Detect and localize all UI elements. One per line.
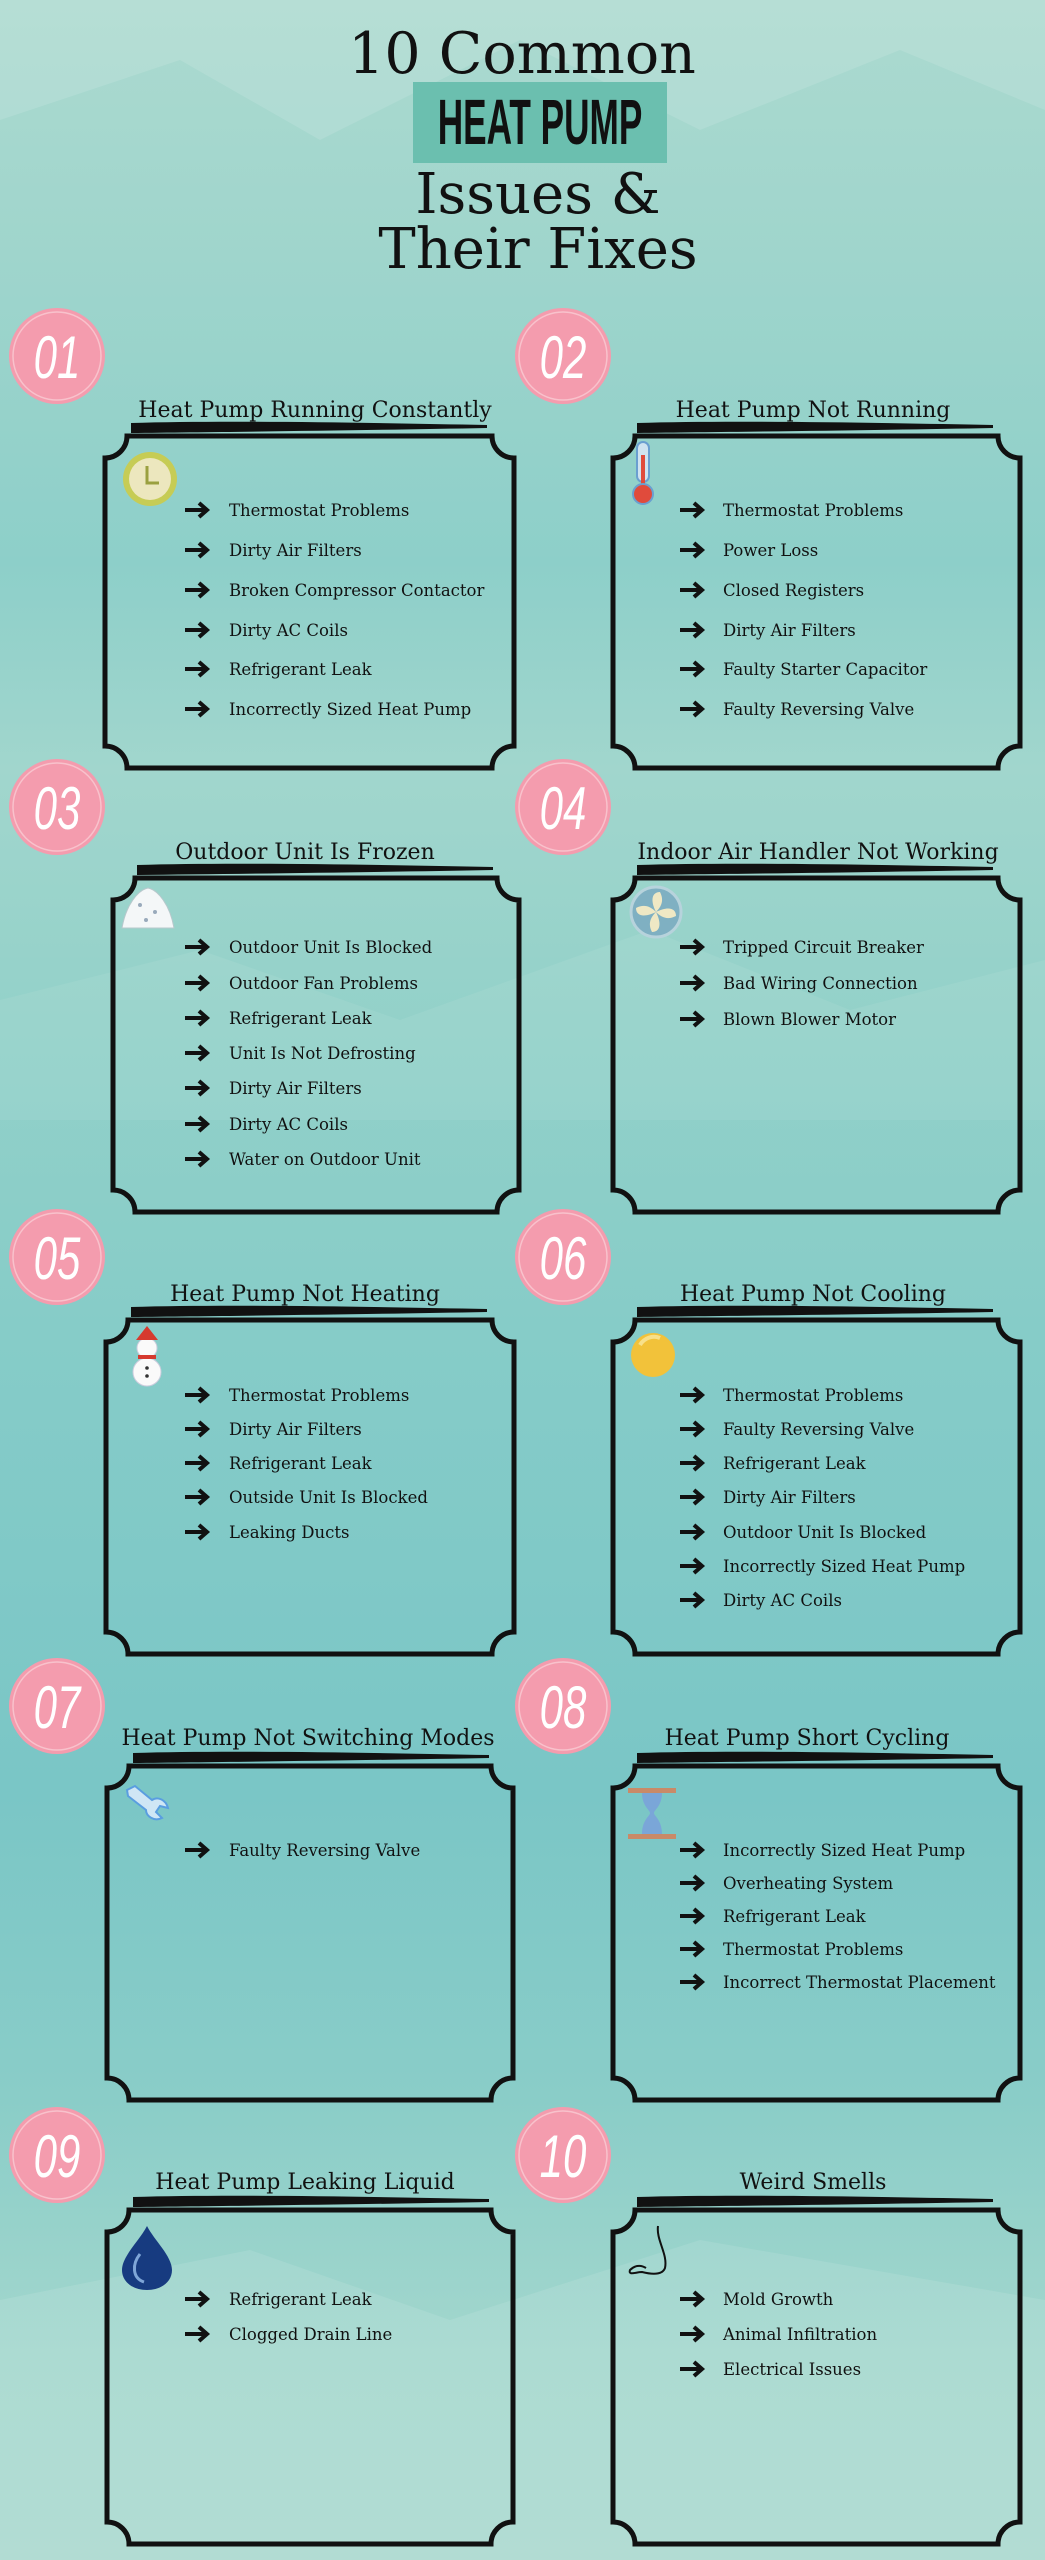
badge 03: 03	[34, 775, 81, 842]
badge 09: 09	[34, 2123, 80, 2190]
panel 04	[613, 878, 1020, 1212]
panel 02: Power Loss	[723, 541, 818, 560]
panel 06: Faulty Reversing Valve	[723, 1420, 914, 1439]
panel 05: Leaking Ducts	[229, 1523, 349, 1542]
badge 07	[9, 1658, 105, 1754]
badge 05	[9, 1209, 105, 1305]
heading 10	[637, 2170, 993, 2207]
panel 03: Unit Is Not Defrosting	[229, 1044, 416, 1063]
heading 01	[131, 398, 492, 433]
badge 08	[515, 1658, 611, 1754]
panel 08: Thermostat Problems	[723, 1940, 903, 1959]
heading 05: Heat Pump Not Heating	[170, 1282, 440, 1307]
heading 09	[133, 2170, 489, 2207]
panel 09: Clogged Drain Line	[229, 2325, 392, 2344]
heading 04: Indoor Air Handler Not Working	[637, 840, 999, 865]
badge 03	[9, 759, 105, 855]
panel 01: Dirty AC Coils	[229, 621, 348, 640]
badge 02: 02	[540, 324, 587, 391]
heading 03: Outdoor Unit Is Frozen	[175, 840, 435, 865]
panel 10: Electrical Issues	[723, 2360, 861, 2379]
panel 03: Refrigerant Leak	[229, 1009, 373, 1028]
heading 06: Heat Pump Not Cooling	[680, 1282, 946, 1307]
panel 01: Dirty Air Filters	[229, 541, 362, 560]
icon: hourglass	[628, 1788, 676, 1839]
title: Their Fixes	[378, 217, 698, 282]
title highlight box: HEAT PUMP	[438, 86, 642, 158]
heading 01: Heat Pump Running Constantly	[138, 398, 492, 423]
badge 10	[515, 2107, 611, 2203]
panel 02: Closed Registers	[723, 581, 864, 600]
heading 08	[637, 1726, 993, 1763]
panel 01	[105, 436, 514, 768]
badge 06: 06	[540, 1225, 587, 1292]
badge 01: 01	[34, 324, 80, 391]
heading 07	[121, 1726, 495, 1763]
panel 03: Dirty AC Coils	[229, 1115, 348, 1134]
panel 07	[107, 1766, 513, 2100]
title: 10 Common	[348, 21, 696, 87]
heading 02: Heat Pump Not Running	[676, 398, 950, 423]
icon: clock	[123, 452, 177, 506]
heading 09: Heat Pump Leaking Liquid	[155, 2170, 455, 2195]
panel 07: Faulty Reversing Valve	[229, 1841, 420, 1860]
heading 03	[137, 840, 493, 875]
icon: sun	[631, 1333, 675, 1377]
badge 01	[9, 308, 105, 404]
panel 03: Outdoor Fan Problems	[229, 974, 418, 993]
icon: snowman	[133, 1326, 161, 1386]
heading 05	[131, 1282, 487, 1317]
title	[348, 21, 698, 282]
panel 06: Dirty AC Coils	[723, 1591, 842, 1610]
panel 09: Refrigerant Leak	[229, 2290, 373, 2309]
panel 03: Water on Outdoor Unit	[229, 1150, 421, 1169]
badge 10: 10	[540, 2123, 587, 2190]
panel 08: Refrigerant Leak	[723, 1907, 867, 1926]
icon: snow pile	[122, 888, 174, 928]
heading 07: Heat Pump Not Switching Modes	[121, 1726, 495, 1751]
panel 09	[107, 2210, 513, 2544]
panel 05: Dirty Air Filters	[229, 1420, 362, 1439]
panel 02	[613, 436, 1020, 768]
panel 01: Refrigerant Leak	[229, 660, 373, 679]
icon: wrench	[127, 1786, 168, 1819]
badge 04: 04	[540, 775, 586, 842]
panel 04: Tripped Circuit Breaker	[723, 938, 924, 957]
icon: nose	[630, 2226, 665, 2274]
heading 02	[637, 398, 993, 433]
panel 02: Faulty Starter Capacitor	[723, 660, 927, 679]
panel 06: Incorrectly Sized Heat Pump	[723, 1557, 965, 1576]
panel 08: Incorrectly Sized Heat Pump	[723, 1841, 965, 1860]
icon: thermometer	[633, 442, 653, 504]
panel 06: Dirty Air Filters	[723, 1488, 856, 1507]
panel 04: Blown Blower Motor	[723, 1010, 896, 1029]
badge 05: 05	[34, 1225, 81, 1292]
panel 05: Refrigerant Leak	[229, 1454, 373, 1473]
panel 10	[613, 2210, 1020, 2544]
panel 10: Animal Infiltration	[722, 2325, 877, 2344]
heading 06	[637, 1282, 993, 1317]
panel 04: Bad Wiring Connection	[723, 974, 918, 993]
panel 03: Dirty Air Filters	[229, 1079, 362, 1098]
panel 01: Incorrectly Sized Heat Pump	[229, 700, 471, 719]
panel 06: Refrigerant Leak	[723, 1454, 867, 1473]
panel 06: Thermostat Problems	[723, 1386, 903, 1405]
panel 05: Outside Unit Is Blocked	[229, 1488, 428, 1507]
icon: fan	[631, 887, 681, 937]
panel 03: Outdoor Unit Is Blocked	[229, 938, 433, 957]
panel 05: Thermostat Problems	[229, 1386, 409, 1405]
icon: water drop	[122, 2226, 172, 2290]
panel 02: Faulty Reversing Valve	[723, 700, 914, 719]
panel 08: Incorrect Thermostat Placement	[723, 1973, 996, 1992]
panel 03	[113, 878, 519, 1212]
panel 10: Mold Growth	[723, 2290, 834, 2309]
panel 01: Broken Compressor Contactor	[229, 581, 484, 600]
heading 08: Heat Pump Short Cycling	[665, 1726, 949, 1751]
badge 04	[515, 759, 611, 855]
panel 08	[613, 1766, 1020, 2100]
panel 01: Thermostat Problems	[229, 501, 409, 520]
badge 07: 07	[34, 1674, 82, 1741]
panel 02: Dirty Air Filters	[723, 621, 856, 640]
panel 06: Outdoor Unit Is Blocked	[723, 1523, 927, 1542]
badge 08: 08	[540, 1674, 587, 1741]
panel 06	[613, 1320, 1020, 1654]
badge 06	[515, 1209, 611, 1305]
panel 08: Overheating System	[723, 1874, 894, 1893]
badge 02	[515, 308, 611, 404]
title: Issues &	[415, 162, 661, 227]
badge 09	[9, 2107, 105, 2203]
panel 05	[106, 1320, 514, 1654]
heading 10: Weird Smells	[740, 2170, 886, 2195]
panel 02: Thermostat Problems	[723, 501, 903, 520]
